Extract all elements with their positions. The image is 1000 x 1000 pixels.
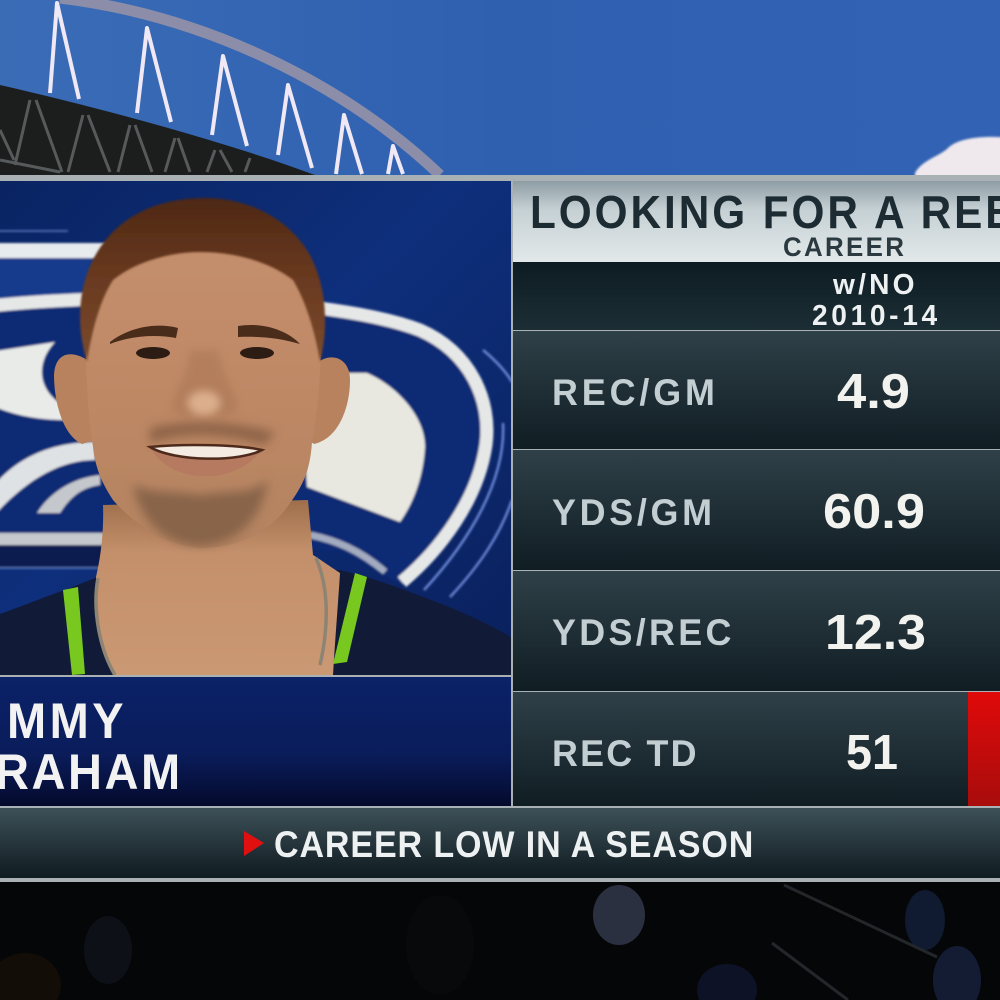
row: YDS/GM — [513, 450, 1000, 570]
player: ears — [54, 354, 350, 444]
player: nose — [175, 352, 235, 418]
panel: column header: 2010-14 — [812, 300, 937, 332]
panel: player name: RAHAM — [0, 745, 180, 800]
panel: stats header: CAREER — [783, 232, 904, 262]
footer bar: CAREER LOW IN A SEASON — [274, 824, 753, 865]
row: REC TD — [513, 692, 1000, 806]
panel: column header: w/NO — [832, 269, 914, 301]
player: collar trim — [63, 573, 367, 675]
row: YDS/REC: YDS/REC — [552, 612, 731, 653]
player: hair — [80, 198, 325, 362]
player: eyebrows and eyes — [110, 325, 300, 359]
player: smile — [150, 445, 262, 476]
player: necklace — [96, 558, 326, 675]
footer bar — [0, 808, 1000, 878]
panel: column header — [513, 262, 1000, 332]
player: face — [86, 240, 321, 548]
row: YDS/GM: YDS/GM — [552, 492, 712, 533]
background: stadium roof and arches — [0, 0, 440, 175]
panel: player photo — [0, 181, 512, 675]
row: YDS/REC — [513, 571, 1000, 691]
panel: player name — [0, 677, 511, 806]
red highlight cell — [968, 692, 1000, 806]
player: jersey — [0, 570, 512, 675]
icon: Seahawks logo — [0, 231, 512, 597]
icon: red arrow — [244, 831, 264, 856]
row: REC TD: REC TD — [552, 733, 697, 774]
player: stubble — [133, 422, 275, 546]
background: crowd strip — [0, 880, 1000, 1000]
row: REC TD: 51 — [846, 726, 898, 780]
row: REC/GM — [513, 331, 1000, 449]
row: YDS/GM: 60.9 — [823, 485, 925, 539]
player: neck and chest — [96, 500, 340, 675]
background: stadium sky — [0, 0, 1000, 185]
row: YDS/REC: 12.3 — [825, 606, 926, 660]
graphic frame — [0, 175, 1000, 882]
panel: player name: MMY — [7, 694, 124, 749]
row: REC/GM: REC/GM — [552, 372, 715, 413]
row: REC/GM: 4.9 — [837, 365, 910, 419]
panel: stats header — [513, 181, 1000, 262]
